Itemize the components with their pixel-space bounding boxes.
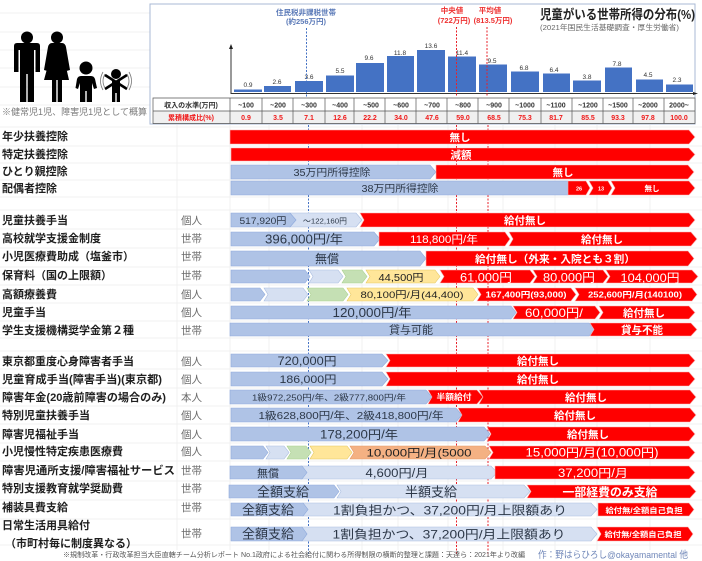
row: 障害児福祉手当: 178,200円/年 — [320, 428, 398, 442]
income table: ~500 — [363, 102, 379, 110]
income table: ~900 — [486, 102, 502, 110]
row: 小児慢性特定疾患医療費: 個人 — [181, 445, 202, 458]
row: 高校就学支援金制度: 高校就学支援金制度 — [2, 231, 101, 245]
income table: 47.6 — [425, 115, 439, 122]
row: 小児医療費助成（塩釜市）: 給付無し（外来・入院とも３割） — [475, 252, 635, 266]
bar chart — [234, 43, 693, 92]
bar chart: 3.8 — [582, 74, 592, 81]
bar chart: 5.5 — [335, 68, 345, 75]
row: 児童育成手当(障害手当)(東京都): 186,000円 — [280, 374, 336, 386]
row: 障害児通所支援/障害福祉サービス: 世帯 — [181, 464, 202, 477]
row: 年少扶養控除: 年少扶養控除 — [2, 129, 68, 143]
income table: ~600 — [393, 102, 409, 110]
row: 障害児通所支援/障害福祉サービス: 障害児通所支援/障害福祉サービス — [2, 463, 175, 477]
income table: ~1000 — [515, 102, 535, 110]
row: 児童育成手当(障害手当)(東京都) — [2, 372, 695, 386]
row: 高額療養費: 80,100円/月(44,400) — [360, 290, 464, 301]
row: 児童手当: 個人 — [181, 306, 202, 319]
bar chart: 2.6 — [272, 79, 282, 86]
income table: 0.9 — [241, 115, 251, 122]
callout: mean: 平均値 — [479, 5, 502, 15]
row: 高額療養費: 個人 — [181, 288, 202, 301]
income table: ~200 — [270, 102, 286, 110]
income table: 収入の水準(万円) — [164, 100, 218, 110]
callout: mean — [474, 5, 513, 25]
bar chart: 9.5 — [487, 58, 497, 65]
row: 障害年金(20歳前障害の場合のみ): 本人 — [181, 391, 202, 404]
row: 高校就学支援金制度: 世帯 — [181, 232, 202, 245]
row: 特別児童扶養手当: 1級628,800円/年、2級418,800円/年 — [258, 409, 444, 422]
income table: 34.0 — [394, 115, 408, 122]
row: 保育料（国の上限額） — [2, 268, 698, 285]
note: family assumption: ※健常児1児、障害児1児として概算 — [2, 106, 147, 117]
income table: 累積構成比(%) — [168, 113, 214, 122]
row: 配偶者控除: 無し — [644, 183, 660, 193]
row: 東京都重度心身障害者手当: 東京都重度心身障害者手当 — [2, 354, 134, 368]
row: 保育料（国の上限額）: 80,000円 — [543, 270, 595, 284]
callout: resident tax exempt household — [276, 7, 336, 26]
row: 障害児福祉手当: 障害児福祉手当 — [2, 427, 79, 441]
row: 東京都重度心身障害者手当: 720,000円 — [278, 356, 336, 368]
row: 児童手当: 児童手当 — [2, 305, 46, 319]
income table: 59.0 — [456, 115, 470, 122]
row: 児童手当: 給付無し — [623, 306, 665, 320]
row: 小児医療費助成（塩釜市）: 無償 — [315, 251, 339, 266]
row: ひとり親控除: ひとり親控除 — [2, 164, 68, 178]
income table: 85.5 — [581, 115, 595, 122]
row: 日常生活用具給付（市町村毎に制度異なる）: 世帯 — [181, 527, 202, 540]
row: 補装具費支給: 補装具費支給 — [2, 500, 68, 514]
row: 保育料（国の上限額）: 世帯 — [181, 269, 202, 282]
row: ひとり親控除 — [2, 164, 694, 179]
row: 日常生活用具給付（市町村毎に制度異なる）: （市町村毎に制度異なる） — [5, 536, 137, 550]
callout: mean: (813.5万円) — [474, 16, 513, 25]
bar chart: 3.6 — [304, 74, 314, 81]
row: 高額療養費 — [2, 287, 697, 301]
income table: ~100 — [238, 102, 254, 110]
row: 配偶者控除: 13 — [598, 186, 604, 192]
row: 東京都重度心身障害者手当: 個人 — [181, 355, 202, 368]
row: 小児慢性特定疾患医療費: 10,000円/月(5000 — [366, 448, 472, 460]
income table: ~800 — [455, 102, 471, 110]
income table: 97.8 — [641, 115, 655, 122]
row: 児童扶養手当: 517,920円 — [240, 216, 286, 227]
income table: 93.3 — [611, 115, 625, 122]
row: 日常生活用具給付（市町村毎に制度異なる）: 1割負担かつ、37,200円/月上限額あり — [332, 528, 566, 542]
row: 日常生活用具給付（市町村毎に制度異なる）: 日常生活用具給付 — [2, 518, 90, 532]
bar chart: 4.5 — [643, 72, 653, 79]
row: 日常生活用具給付（市町村毎に制度異なる）: 給付無/全額自己負担 — [604, 529, 682, 539]
callout: resident tax exempt household: 住民税非課税世帯 — [276, 7, 336, 17]
income table: ~700 — [424, 102, 440, 110]
row: 障害児通所支援/障害福祉サービス: 4,600円/月 — [366, 468, 428, 480]
income table: 22.2 — [363, 115, 377, 122]
income table: ~1200 — [578, 102, 598, 110]
row: 小児医療費助成（塩釜市）: 小児医療費助成（塩釜市） — [2, 249, 134, 263]
row: 小児慢性特定疾患医療費: 小児慢性特定疾患医療費 — [2, 444, 123, 458]
row: 学生支援機構奨学金第２種: 学生支援機構奨学金第２種 — [2, 323, 134, 337]
row: 特別支援教育就学奨励費 — [2, 481, 696, 500]
callout: median: 中央値 — [441, 5, 464, 15]
row: 学生支援機構奨学金第２種: 世帯 — [181, 324, 202, 337]
bar chart: 6.4 — [549, 67, 559, 74]
income table: 12.6 — [333, 115, 347, 122]
resident tax line over chart — [306, 28, 308, 97]
row: 障害児通所支援/障害福祉サービス: 無償 — [257, 466, 279, 480]
row: 特別児童扶養手当: 給付無し — [554, 409, 596, 422]
axis arrowheads — [229, 44, 698, 95]
row: 児童手当 — [2, 305, 695, 320]
row: 保育料（国の上限額）: 104,000円 — [620, 271, 680, 285]
income table: ~1100 — [546, 102, 566, 110]
row: 配偶者控除: 26 — [576, 186, 582, 192]
icon: mother — [44, 32, 70, 102]
row: 高額療養費: 高額療養費 — [2, 287, 57, 301]
row: 特別児童扶養手当 — [2, 408, 696, 422]
row: 特別支援教育就学奨励費: 半額支給 — [405, 484, 457, 500]
income table: ~400 — [332, 102, 348, 110]
row: 児童育成手当(障害手当)(東京都): 給付無し — [517, 373, 559, 386]
row: 配偶者控除: 38万円所得控除 — [362, 182, 438, 195]
income table: ~1500 — [608, 102, 628, 110]
row: 障害年金(20歳前障害の場合のみ): 1級972,250円/年、2級777,800円/年 — [252, 392, 407, 402]
reference line: median income — [456, 125, 458, 556]
row: 東京都重度心身障害者手当: 給付無し — [517, 354, 559, 368]
row: 障害年金(20歳前障害の場合のみ): 半額給付 — [436, 392, 472, 402]
row: 障害児福祉手当: 個人 — [181, 428, 202, 441]
bar chart: 2.3 — [672, 77, 682, 84]
bar chart: 9.6 — [364, 55, 374, 62]
row: ひとり親控除: 35万円所得控除 — [294, 166, 370, 179]
row: 小児慢性特定疾患医療費: 15,000円/月(10,000円) — [526, 448, 659, 460]
callout: median: (722万円) — [438, 16, 471, 25]
income table: 100.0 — [670, 115, 688, 122]
reference line: resident tax exempt household — [308, 125, 310, 556]
chart subtitle: (2021年国民生活基礎調査・厚生労働省) — [540, 22, 680, 32]
row: 学生支援機構奨学金第２種: 貸与不能 — [621, 324, 663, 336]
median and mean lines over chart — [456, 27, 487, 97]
row: 児童手当: 120,000円/年 — [332, 306, 412, 320]
income table: ~300 — [301, 102, 317, 110]
income table: 2000~ — [669, 102, 689, 110]
row: 児童手当: 60,000円/ — [525, 306, 584, 320]
row: 障害児福祉手当: 給付無し — [567, 428, 609, 441]
row: 特別支援教育就学奨励費: 特別支援教育就学奨励費 — [2, 481, 123, 495]
row: 東京都重度心身障害者手当 — [2, 354, 695, 368]
row: 高額療養費: 167,400円(93,000) — [486, 290, 567, 300]
row: 障害児福祉手当 — [2, 427, 695, 442]
row: 特定扶養控除: 特定扶養控除 — [2, 147, 68, 161]
row: 高額療養費: 252,600円/月(140100) — [588, 290, 682, 300]
icon: child — [76, 62, 97, 102]
row: 児童育成手当(障害手当)(東京都): 個人 — [181, 373, 202, 386]
row: 障害年金(20歳前障害の場合のみ): 障害年金(20歳前障害の場合のみ) — [2, 390, 166, 404]
row: 特別児童扶養手当: 個人 — [181, 409, 202, 422]
row: 障害児通所支援/障害福祉サービス — [2, 463, 695, 480]
income table: 3.5 — [273, 115, 283, 122]
bar chart: 13.6 — [425, 43, 438, 50]
row: 配偶者控除: 配偶者控除 — [2, 181, 57, 195]
row: ひとり親控除: 無し — [552, 166, 574, 179]
income table: 75.3 — [518, 115, 532, 122]
row: 補装具費支給 — [2, 500, 694, 518]
callout: median — [438, 5, 471, 25]
row: 特別支援教育就学奨励費: 世帯 — [181, 482, 202, 495]
bar chart: 11.4 — [456, 50, 468, 57]
row: 特定扶養控除 — [2, 147, 695, 162]
row: 特別児童扶養手当: 特別児童扶養手当 — [2, 408, 90, 422]
row: 小児医療費助成（塩釜市） — [2, 249, 694, 266]
source footnote: ※規制改革・行政改革担当大臣直轄チーム分析レポート No.1政府による社会給付に関わる所得制限の横断的整理と課題：天達ら：2021年より改編 — [63, 550, 525, 559]
row: 年少扶養控除: 無し — [450, 131, 470, 144]
row: 学生支援機構奨学金第２種 — [2, 322, 697, 337]
row: 日常生活用具給付（市町村毎に制度異なる）: 全額支給 — [242, 526, 294, 542]
row: 学生支援機構奨学金第２種: 貸与可能 — [389, 322, 433, 336]
row: 小児慢性特定疾患医療費 — [2, 444, 695, 460]
income table: 81.7 — [549, 115, 563, 122]
bar chart: 6.8 — [519, 65, 529, 72]
row: 児童育成手当(障害手当)(東京都): 児童育成手当(障害手当)(東京都) — [2, 372, 162, 386]
row: 保育料（国の上限額）: 保育料（国の上限額） — [2, 268, 112, 282]
row: 高校就学支援金制度: 396,000円/年 — [265, 232, 343, 246]
row: 児童扶養手当: ～122,160円 — [303, 216, 347, 226]
family pictograms — [14, 32, 132, 102]
income table: ~2000 — [638, 102, 658, 110]
income table: 7.1 — [304, 115, 314, 122]
row: 障害年金(20歳前障害の場合のみ) — [2, 390, 696, 404]
row: 保育料（国の上限額）: 61,000円 — [460, 270, 512, 284]
row: 児童扶養手当: 給付無し — [504, 214, 546, 227]
row: 補装具費支給: 給付無/全額自己負担 — [606, 505, 683, 515]
callout: resident tax exempt household: (約256万円) — [286, 16, 327, 26]
income table: 68.5 — [487, 115, 501, 122]
row: 小児医療費助成（塩釜市）: 世帯 — [181, 250, 202, 263]
bar chart: 0.9 — [243, 82, 253, 89]
row: 配偶者控除 — [2, 181, 695, 195]
row: 特別支援教育就学奨励費: 全額支給 — [257, 484, 309, 500]
row: 特定扶養控除: 減額 — [450, 148, 472, 162]
bar chart: 7.8 — [612, 61, 622, 68]
row: 補装具費支給: 1割負担かつ、37,200円/月上限額あり — [333, 504, 567, 518]
icon: child with disability — [100, 69, 132, 102]
icon: father — [14, 32, 40, 102]
reference line: mean income — [487, 125, 489, 556]
row: 補装具費支給: 世帯 — [181, 501, 202, 514]
row: 補装具費支給: 全額支給 — [242, 502, 294, 518]
row: 特別支援教育就学奨励費: 一部経費のみ支給 — [562, 485, 658, 499]
row: 高校就学支援金制度 — [2, 231, 697, 246]
row: 児童扶養手当 — [2, 213, 695, 227]
row: 日常生活用具給付（市町村毎に制度異なる） — [2, 518, 693, 550]
panel: income distribution chart — [150, 4, 698, 124]
author credit: 作：野はらひろし@okayamamental 他 — [538, 549, 688, 561]
row: 年少扶養控除 — [2, 129, 695, 144]
row: 保育料（国の上限額）: 44,500円 — [378, 273, 424, 284]
row: 児童扶養手当: 個人 — [181, 214, 202, 227]
income table — [153, 98, 695, 124]
row: 障害児通所支援/障害福祉サービス: 37,200円/月 — [558, 468, 628, 480]
row: 障害年金(20歳前障害の場合のみ): 給付無し — [565, 391, 607, 404]
row: 児童扶養手当: 児童扶養手当 — [2, 213, 68, 227]
chart axes — [231, 47, 694, 94]
row: 高校就学支援金制度: 118,800円/年 — [410, 232, 478, 246]
row: 高校就学支援金制度: 給付無し — [581, 233, 623, 246]
bar chart: 11.8 — [394, 50, 406, 57]
